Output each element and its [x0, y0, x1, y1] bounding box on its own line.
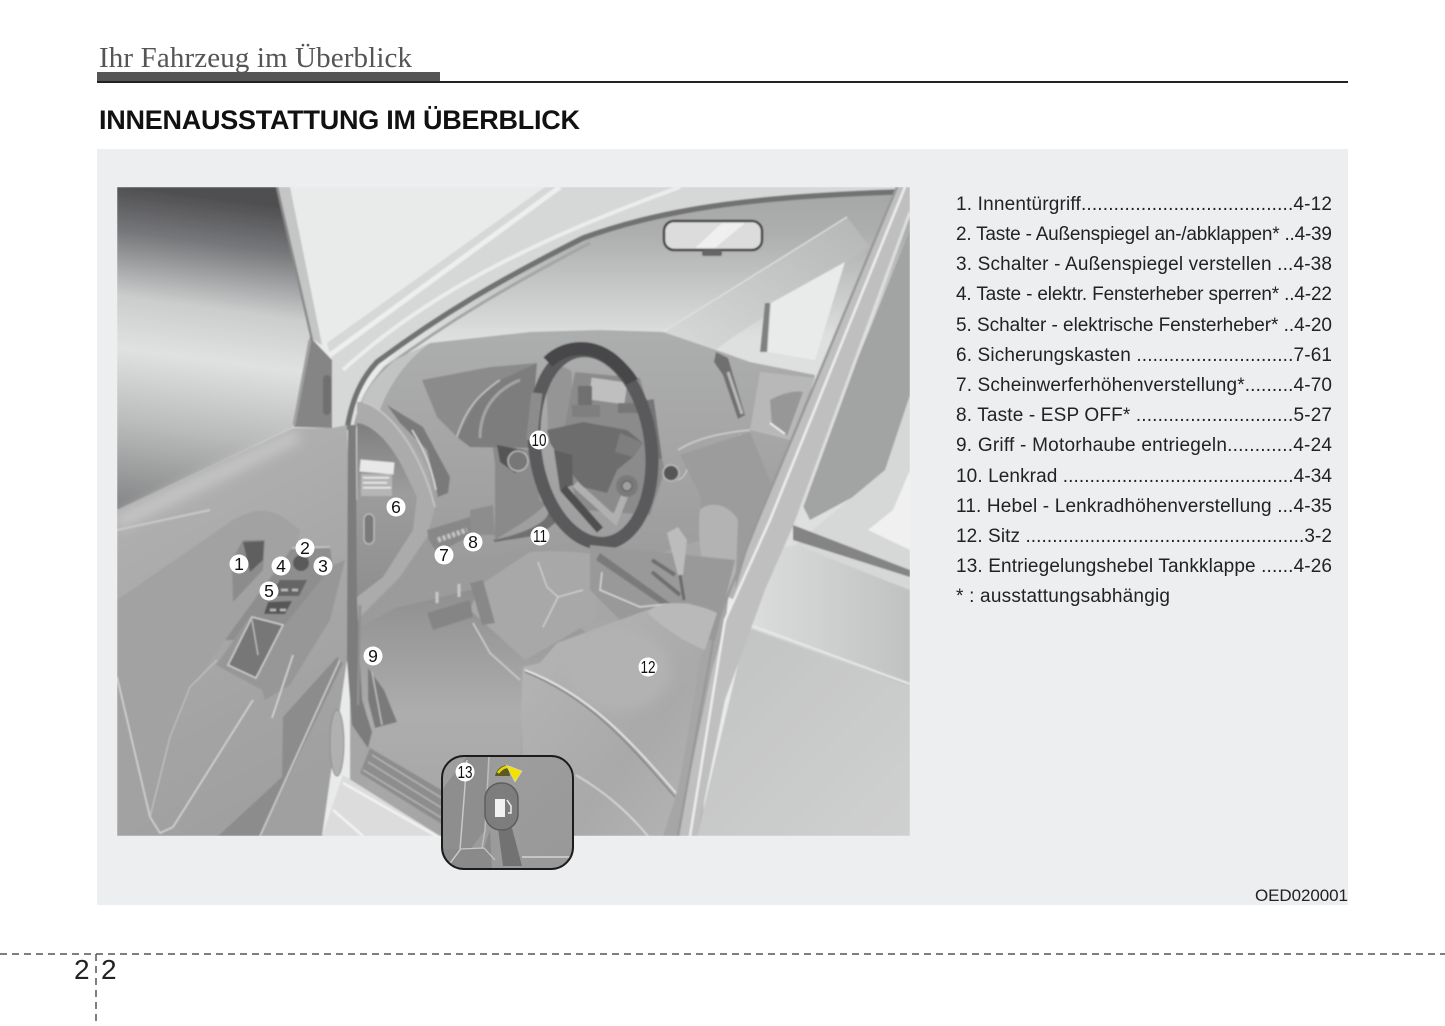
steering wheel [522, 343, 664, 551]
icon: fuel pump [495, 799, 511, 817]
callout 13: 13 [458, 762, 472, 782]
passenger door frame [677, 187, 910, 836]
component list: 10. Lenkrad ...........................................4-34 [956, 466, 1332, 487]
column stalk block [470, 505, 495, 535]
door lower dark section [218, 657, 343, 836]
lever shaft [498, 828, 522, 866]
instrument binnacle [422, 363, 537, 437]
windshield and headliner [350, 190, 910, 560]
icon: yellow arrow [495, 765, 522, 782]
callout 10: 10 [532, 430, 547, 450]
callout 8: 8 [468, 532, 478, 552]
callout numbers on illustration [230, 430, 658, 677]
component list: * : ausstattungsabhängig [956, 586, 1170, 607]
callout 5 [260, 581, 278, 601]
component list: 5. Schalter - elektrische Fensterheber* ..4-20 [956, 315, 1332, 336]
accelerator pedal [470, 580, 495, 625]
callout 3 [314, 556, 332, 576]
footer crop lines [0, 954, 1445, 1024]
hood release lever [368, 668, 397, 728]
page number: 2 [74, 954, 90, 985]
callout 9 [364, 646, 382, 666]
door mirror triangle [294, 337, 332, 428]
component list: 1. Innentürgriff.......................................4-12 [956, 194, 1332, 215]
lower centre background [350, 500, 740, 836]
component list: 8. Taste - ESP OFF* .............................5-27 [956, 405, 1332, 426]
component list: 13. Entriegelungshebel Tankklappe ......4-26 [956, 556, 1332, 577]
seat [521, 603, 717, 836]
door panel [117, 425, 353, 836]
door speaker [330, 710, 344, 776]
center stack [560, 372, 665, 515]
brake pedal [427, 600, 473, 630]
page number: 2 [101, 954, 117, 985]
a-pillar [680, 218, 862, 349]
door pocket lines [117, 677, 253, 833]
component list: 6. Sicherungskasten .............................7-61 [956, 345, 1332, 366]
component list: 12. Sitz ....................................................3-2 [956, 526, 1332, 547]
figure code: OED020001 [1255, 886, 1348, 905]
door jamb [347, 425, 372, 748]
side window [768, 262, 845, 360]
panel: interior overview background [97, 149, 1348, 905]
right side exterior [800, 230, 910, 520]
right air vent [714, 352, 745, 419]
page number [74, 954, 117, 985]
illustration: car interior [117, 187, 910, 838]
component list: 7. Scheinwerferhöhenverstellung*.........4-70 [956, 375, 1332, 396]
fuse cover [357, 402, 435, 620]
steering column [493, 447, 545, 540]
callout 3: 3 [318, 556, 328, 576]
left air vent [387, 405, 450, 497]
callout 6 [386, 497, 406, 517]
callout 5: 5 [264, 581, 274, 601]
component list: 9. Griff - Motorhaube entriegeln............4-24 [956, 435, 1332, 456]
callout 6: 6 [391, 497, 401, 517]
callout 7 [434, 545, 454, 565]
console and gear lever [590, 527, 735, 640]
callout 1 [230, 554, 248, 574]
dashboard [380, 330, 816, 556]
callout 2 [296, 538, 314, 558]
callout 4 [272, 556, 290, 576]
title accent bar [97, 72, 440, 82]
side sill [322, 748, 445, 838]
component list: 4. Taste - elektr. Fensterheber sperren* ..4-22 [956, 284, 1332, 305]
callout 2: 2 [300, 538, 310, 558]
door pull handle [232, 540, 265, 602]
component list: 3. Schalter - Außenspiegel verstellen ...4-38 [956, 254, 1332, 275]
callout 7: 7 [439, 545, 449, 565]
callout 9: 9 [368, 646, 378, 666]
callout 4: 4 [276, 556, 286, 576]
climate knob [663, 465, 679, 481]
door window [117, 187, 311, 510]
component list: 2. Taste - Außenspiegel an-/abklappen* ..4-39 [956, 224, 1332, 245]
callout 8 [464, 532, 482, 552]
component list [956, 194, 1332, 607]
fuse box slot [364, 514, 374, 544]
callout 1: 1 [234, 554, 244, 574]
lower dash trim [362, 542, 451, 625]
rear-view mirror [664, 221, 762, 256]
cup armrest [216, 560, 345, 700]
floor [361, 590, 584, 649]
section title: Ihr Fahrzeug im Überblick [99, 42, 412, 74]
callout 12: 12 [640, 657, 656, 677]
component list: 11. Hebel - Lenkradhöhenverstellung ...4-35 [956, 496, 1332, 517]
window switch plate [225, 547, 333, 640]
callout 11: 11 [533, 526, 547, 546]
glove box and passenger side [682, 433, 762, 590]
main heading: INNENAUSSTATTUNG IM ÜBERBLICK [99, 105, 580, 135]
inset: fuel filler release [442, 756, 573, 870]
lever body [485, 783, 518, 830]
fuse label [360, 460, 394, 496]
roof bands [327, 187, 897, 430]
